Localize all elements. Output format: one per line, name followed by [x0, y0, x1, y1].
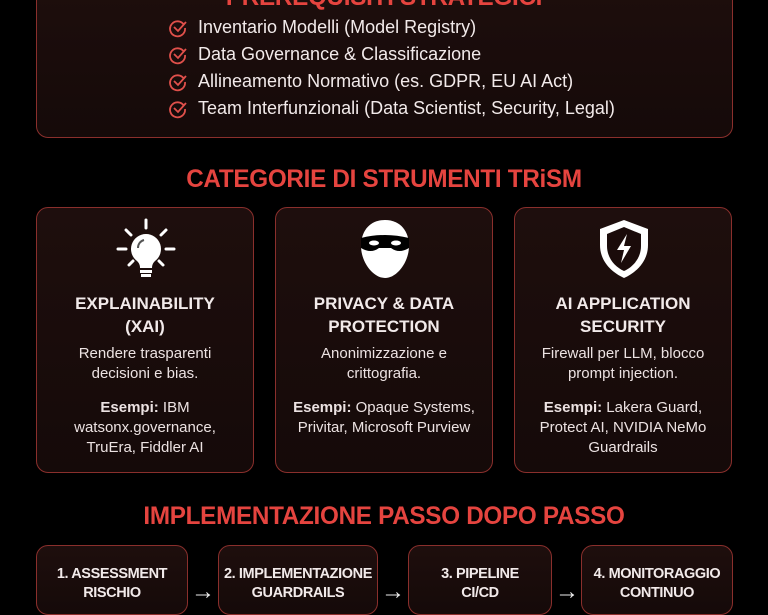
step 3: CI/CD [461, 585, 499, 601]
card: security: prompt injection. [568, 365, 678, 382]
panel: prerequisiti [36, 0, 733, 138]
arrow 2: → [381, 578, 405, 605]
checklist: Data Governance & Classificazione [198, 44, 481, 64]
heading: categorie: CATEGORIE DI STRUMENTI TRiSM [186, 165, 582, 193]
step 3: 3. PIPELINE [441, 566, 519, 582]
card: privacy: PROTECTION [328, 317, 440, 336]
item 1 [169, 17, 476, 38]
icon: mask [361, 220, 409, 278]
checklist [169, 17, 615, 118]
step 2: GUARDRAILS [252, 585, 344, 601]
step 1 [36, 545, 188, 615]
card: explainability: EXPLAINABILITY [75, 294, 215, 313]
card: explainability: Esempi: IBM [100, 399, 190, 416]
step 2 [218, 545, 378, 615]
step 4: 4. MONITORAGGIO [594, 566, 720, 582]
card: privacy: Anonimizzazione e [321, 345, 447, 362]
card: privacy [275, 207, 493, 473]
arrow 1: → [191, 578, 215, 605]
item 2 [169, 44, 481, 64]
card: explainability: Rendere trasparenti [79, 345, 211, 362]
card: explainability [36, 207, 254, 473]
checklist: Inventario Modelli (Model Registry) [198, 17, 476, 37]
icon: shield [600, 220, 648, 278]
step 1: RISCHIO [83, 585, 141, 601]
heading: implementazione: IMPLEMENTAZIONE PASSO DOPO PASSO [143, 502, 625, 530]
checklist: Allineamento Normativo (es. GDPR, EU AI Act) [198, 71, 573, 91]
card: privacy: PRIVACY & DATA [314, 294, 454, 313]
card: security [514, 207, 732, 473]
card: security: AI APPLICATION [555, 294, 691, 313]
card: security: SECURITY [580, 317, 666, 336]
item 3 [169, 71, 573, 92]
step 1: 1. ASSESSMENT [57, 566, 167, 582]
step 2: 2. IMPLEMENTAZIONE [224, 566, 372, 582]
card: security: Protect AI, NVIDIA NeMo [540, 419, 706, 436]
card: privacy: crittografia. [347, 365, 421, 382]
card: explainability: (XAI) [125, 317, 165, 336]
item 4 [169, 98, 615, 118]
checklist: Team Interfunzionali (Data Scientist, Security, Legal) [198, 98, 615, 118]
card: explainability: watsonx.governance, [74, 419, 216, 436]
arrow 3: → [555, 578, 579, 605]
card: privacy: Esempi: Opaque Systems, [293, 399, 475, 416]
step 3 [408, 545, 552, 615]
card: explainability: TruEra, Fiddler AI [86, 439, 203, 456]
card: security: Esempi: Lakera Guard, [544, 399, 702, 416]
icon: lightbulb [116, 218, 176, 277]
step 4: CONTINUO [620, 585, 694, 601]
card: privacy: Privitar, Microsoft Purview [298, 419, 470, 436]
card: explainability: decisioni e bias. [92, 365, 198, 382]
step 4 [581, 545, 733, 615]
card: security: Firewall per LLM, blocco [542, 345, 704, 362]
card: security: Guardrails [588, 439, 658, 456]
